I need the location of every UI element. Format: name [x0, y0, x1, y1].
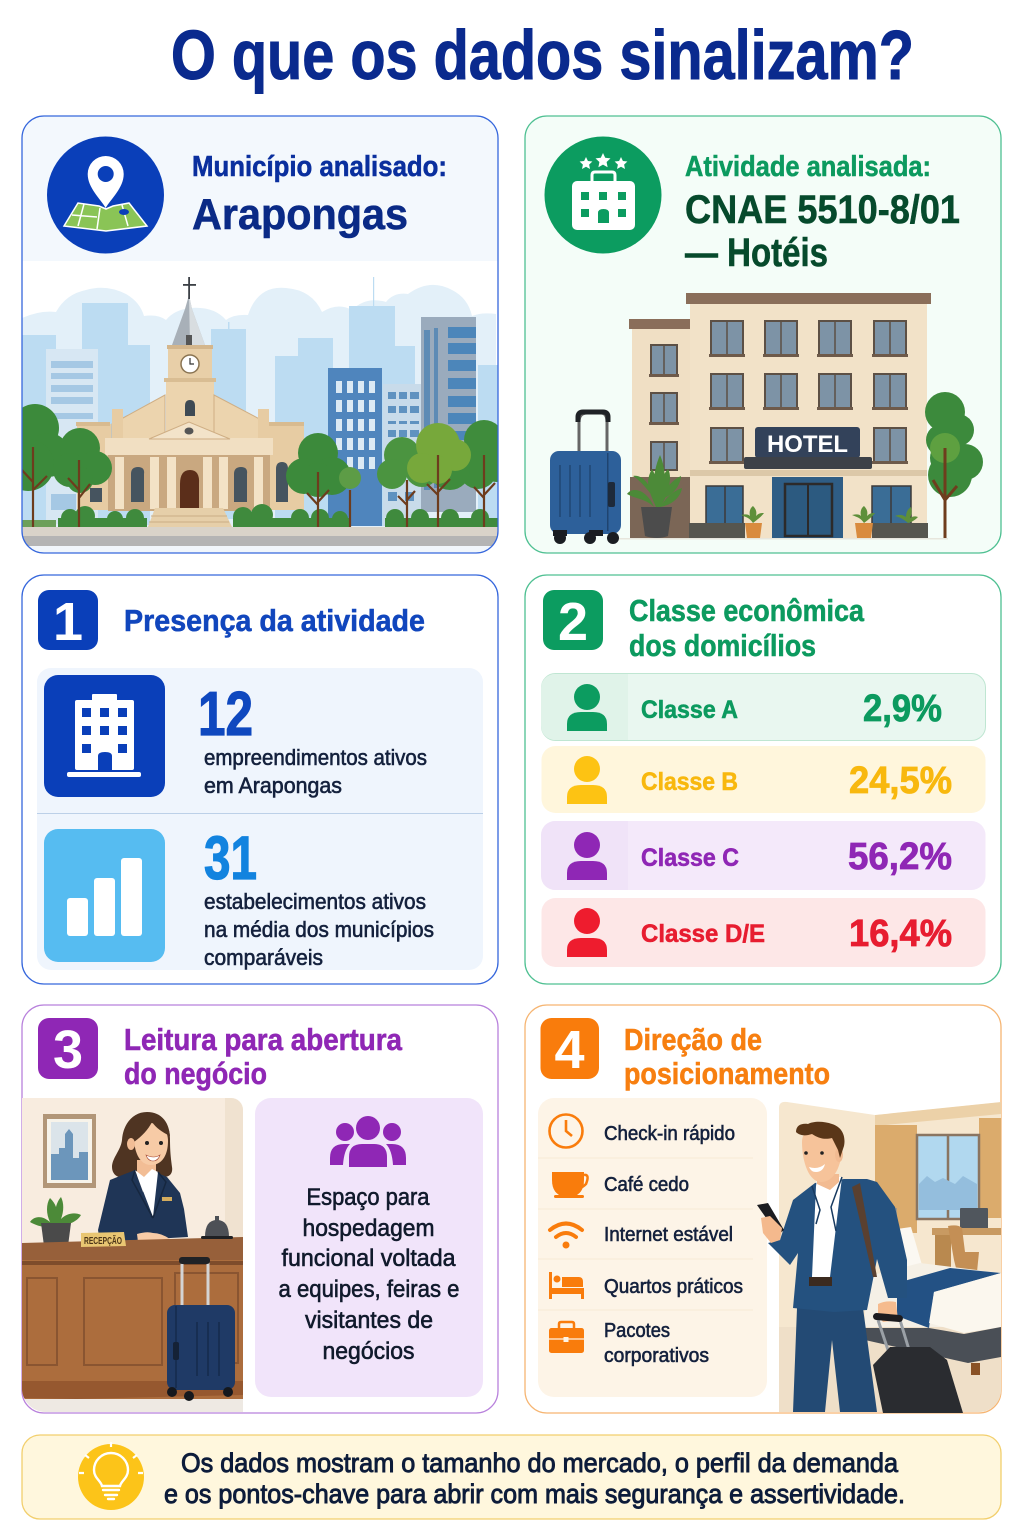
icon: service bell — [201, 1216, 233, 1239]
badge 2 — [543, 590, 603, 652]
icon: tree — [925, 392, 983, 538]
row: classe B: 24,5% — [849, 760, 952, 802]
panel 1: presença da atividade — [22, 575, 498, 984]
badge 3: 3 — [53, 1020, 83, 1080]
text: espaço para hospedagem: visitantes de — [305, 1307, 433, 1334]
badge 1: 1 — [53, 592, 83, 652]
heading 2: Classe econômica — [629, 593, 865, 628]
rolling suitcase — [878, 1320, 913, 1363]
row: classe D/E: Classe D/E — [641, 920, 765, 948]
text: estabelecimentos: estabelecimentos ativos — [204, 889, 426, 914]
badge 1 — [38, 590, 98, 652]
row: classe C — [541, 821, 986, 890]
trousers — [793, 1308, 877, 1412]
callout: conclusion — [22, 1435, 1001, 1519]
panel: município analisado — [2, 116, 514, 553]
head — [802, 1126, 842, 1182]
heading: Arapongas: Arapongas — [192, 190, 408, 239]
badge 2: 2 — [558, 592, 588, 652]
text: internet: Internet estável — [604, 1224, 733, 1246]
text: empreendimentos: em Arapongas — [204, 773, 342, 798]
heading 2: dos domicílios — [629, 628, 816, 663]
text: café: Café cedo — [604, 1174, 689, 1196]
text: espaço para hospedagem — [278, 1184, 460, 1365]
icon: blue suitcase — [550, 412, 621, 544]
badge 3 — [38, 1018, 98, 1080]
text: espaço para hospedagem: negócios — [322, 1338, 414, 1365]
sign: recepção: RECEPÇÃO — [84, 1234, 122, 1247]
street and bushes — [22, 504, 498, 553]
text: conclusion: e os pontos-chave para abrir com mais segurança e assertividade. — [164, 1479, 905, 1509]
panel: atividade analisada — [525, 116, 1001, 553]
row: classe D/E: 16,4% — [849, 913, 952, 955]
icon: briefcase — [549, 1322, 584, 1353]
jacket — [768, 1179, 907, 1312]
row: classe D/E — [542, 898, 986, 967]
heading: CNAE: CNAE 5510-8/01 — [685, 188, 960, 232]
text: estabelecimentos — [204, 889, 434, 970]
icon: potted plant — [627, 455, 682, 538]
text: empreendimentos — [204, 745, 427, 798]
church — [76, 277, 304, 527]
illustration: hotel building — [550, 293, 983, 544]
row: classe B: Classe B — [641, 768, 738, 796]
receptionist — [98, 1112, 188, 1242]
text: empreendimentos: empreendimentos ativos — [204, 745, 427, 770]
stat: 12: 12 — [198, 680, 253, 749]
heading 4: Direção de — [624, 1022, 762, 1057]
heading 3 — [124, 1022, 403, 1091]
heading 4 — [624, 1022, 830, 1091]
icon: light bulb — [78, 1442, 144, 1510]
row: classe C: Classe C — [641, 844, 739, 872]
neck — [817, 1174, 839, 1190]
sign: recepção — [81, 1232, 126, 1247]
badge 4 — [540, 1018, 599, 1080]
row: classe A: Classe A — [641, 696, 738, 724]
heading: atividade: Atividade analisada: — [685, 151, 931, 183]
badge 4: 4 — [554, 1020, 585, 1080]
shirt — [812, 1177, 842, 1277]
text: pacotes corporativos: Pacotes — [604, 1320, 670, 1342]
text: espaço para hospedagem: funcional voltada — [282, 1245, 456, 1272]
stat: 31: 31 — [204, 824, 257, 892]
text: check-in: Check-in rápido — [604, 1123, 735, 1145]
text: quartos: Quartos práticos — [604, 1276, 743, 1298]
text: estabelecimentos: na média dos municípios — [204, 917, 434, 942]
heading: Hotéis: — Hotéis — [685, 231, 828, 275]
icon: bed — [549, 1272, 584, 1299]
icon: people group — [330, 1116, 406, 1167]
text: conclusion: Os dados mostram o tamanho do mercado, o perfil da demanda — [181, 1448, 899, 1478]
illustration: business traveller in room — [757, 1100, 1001, 1413]
text: espaço para hospedagem: Espaço para — [306, 1184, 430, 1211]
illustration: receptionist at desk — [22, 1098, 243, 1412]
row: classe C: 56,2% — [848, 836, 952, 878]
text: espaço para hospedagem: hospedagem — [302, 1215, 434, 1242]
icon: building — [44, 675, 165, 797]
row: classe A: 2,9% — [863, 688, 942, 730]
icon: navy suitcase — [167, 1257, 235, 1401]
row: classe B — [542, 746, 986, 813]
text: pacotes corporativos — [604, 1320, 709, 1367]
text: espaço para hospedagem: a equipes, feiras e — [278, 1276, 460, 1303]
text: pacotes corporativos: corporativos — [604, 1345, 709, 1367]
icon: bar chart — [44, 829, 165, 962]
trees — [2, 404, 514, 527]
text: conclusion — [164, 1448, 905, 1509]
heading 1: Presença da atividade — [124, 603, 425, 638]
icon: map pin — [47, 136, 164, 254]
icon: clock — [550, 1114, 582, 1148]
row: classe A — [541, 674, 986, 740]
icon: hotel with stars — [544, 136, 662, 254]
hair — [796, 1122, 844, 1158]
heading: município: Município analisado: — [192, 151, 447, 183]
belt — [809, 1277, 832, 1286]
phone — [757, 1203, 784, 1235]
heading 2 — [629, 593, 865, 663]
panel 4: direção de posicionamento — [525, 1005, 1001, 1413]
strap — [852, 1183, 877, 1277]
illustration: Arapongas city and church — [2, 277, 514, 553]
icon: wifi — [550, 1224, 582, 1248]
heading 3: Leitura para abertura — [124, 1022, 403, 1057]
heading 3: do negócio — [124, 1056, 267, 1091]
hand with phone — [761, 1216, 782, 1243]
heading 4: posicionamento — [624, 1056, 830, 1091]
illustration: hotel building: HOTEL — [767, 431, 848, 458]
text: estabelecimentos: comparáveis — [204, 945, 323, 970]
icon: coffee cup — [552, 1172, 588, 1198]
panel 2: classe econômica — [525, 575, 1001, 984]
man figure — [757, 1122, 963, 1413]
right hand — [878, 1301, 898, 1322]
panel 3: leitura para abertura — [22, 1005, 498, 1413]
